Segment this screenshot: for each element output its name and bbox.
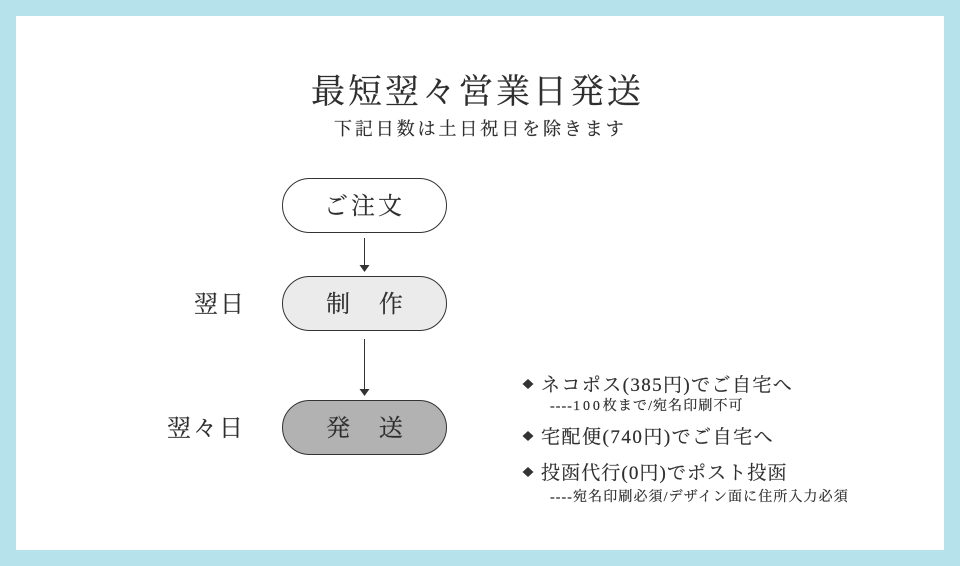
icon: diamond bullet 3	[522, 467, 534, 477]
note: nekopos: ----100枚まで/宛名印刷不可	[550, 399, 744, 414]
icon: diamond bullet 2	[522, 431, 534, 441]
step: order: ご注文	[324, 194, 405, 220]
list item: nekopos: ネコポス(385円)でご自宅へ	[541, 375, 793, 396]
step: order	[282, 178, 447, 233]
list item: posting service: 投函代行(0円)でポスト投函	[541, 463, 788, 484]
icon: diamond bullet 1	[522, 379, 534, 389]
step: production	[282, 276, 447, 331]
label: day after next: 翌々日	[167, 416, 245, 442]
step: shipping: 発 送	[326, 416, 403, 442]
subtitle: 下記日数は土日祝日を除きます	[334, 119, 627, 139]
arrow: production to shipping	[360, 339, 370, 396]
list item: takuhaibin: 宅配便(740円)でご自宅へ	[541, 427, 774, 448]
note: posting service: ----宛名印刷必須/デザイン面に住所入力必須	[550, 490, 849, 505]
label: next day: 翌日	[194, 292, 246, 318]
title: 最短翌々営業日発送	[311, 74, 644, 111]
step: production: 制 作	[326, 292, 403, 318]
step: shipping	[282, 400, 447, 455]
arrow: order to production	[360, 238, 370, 272]
